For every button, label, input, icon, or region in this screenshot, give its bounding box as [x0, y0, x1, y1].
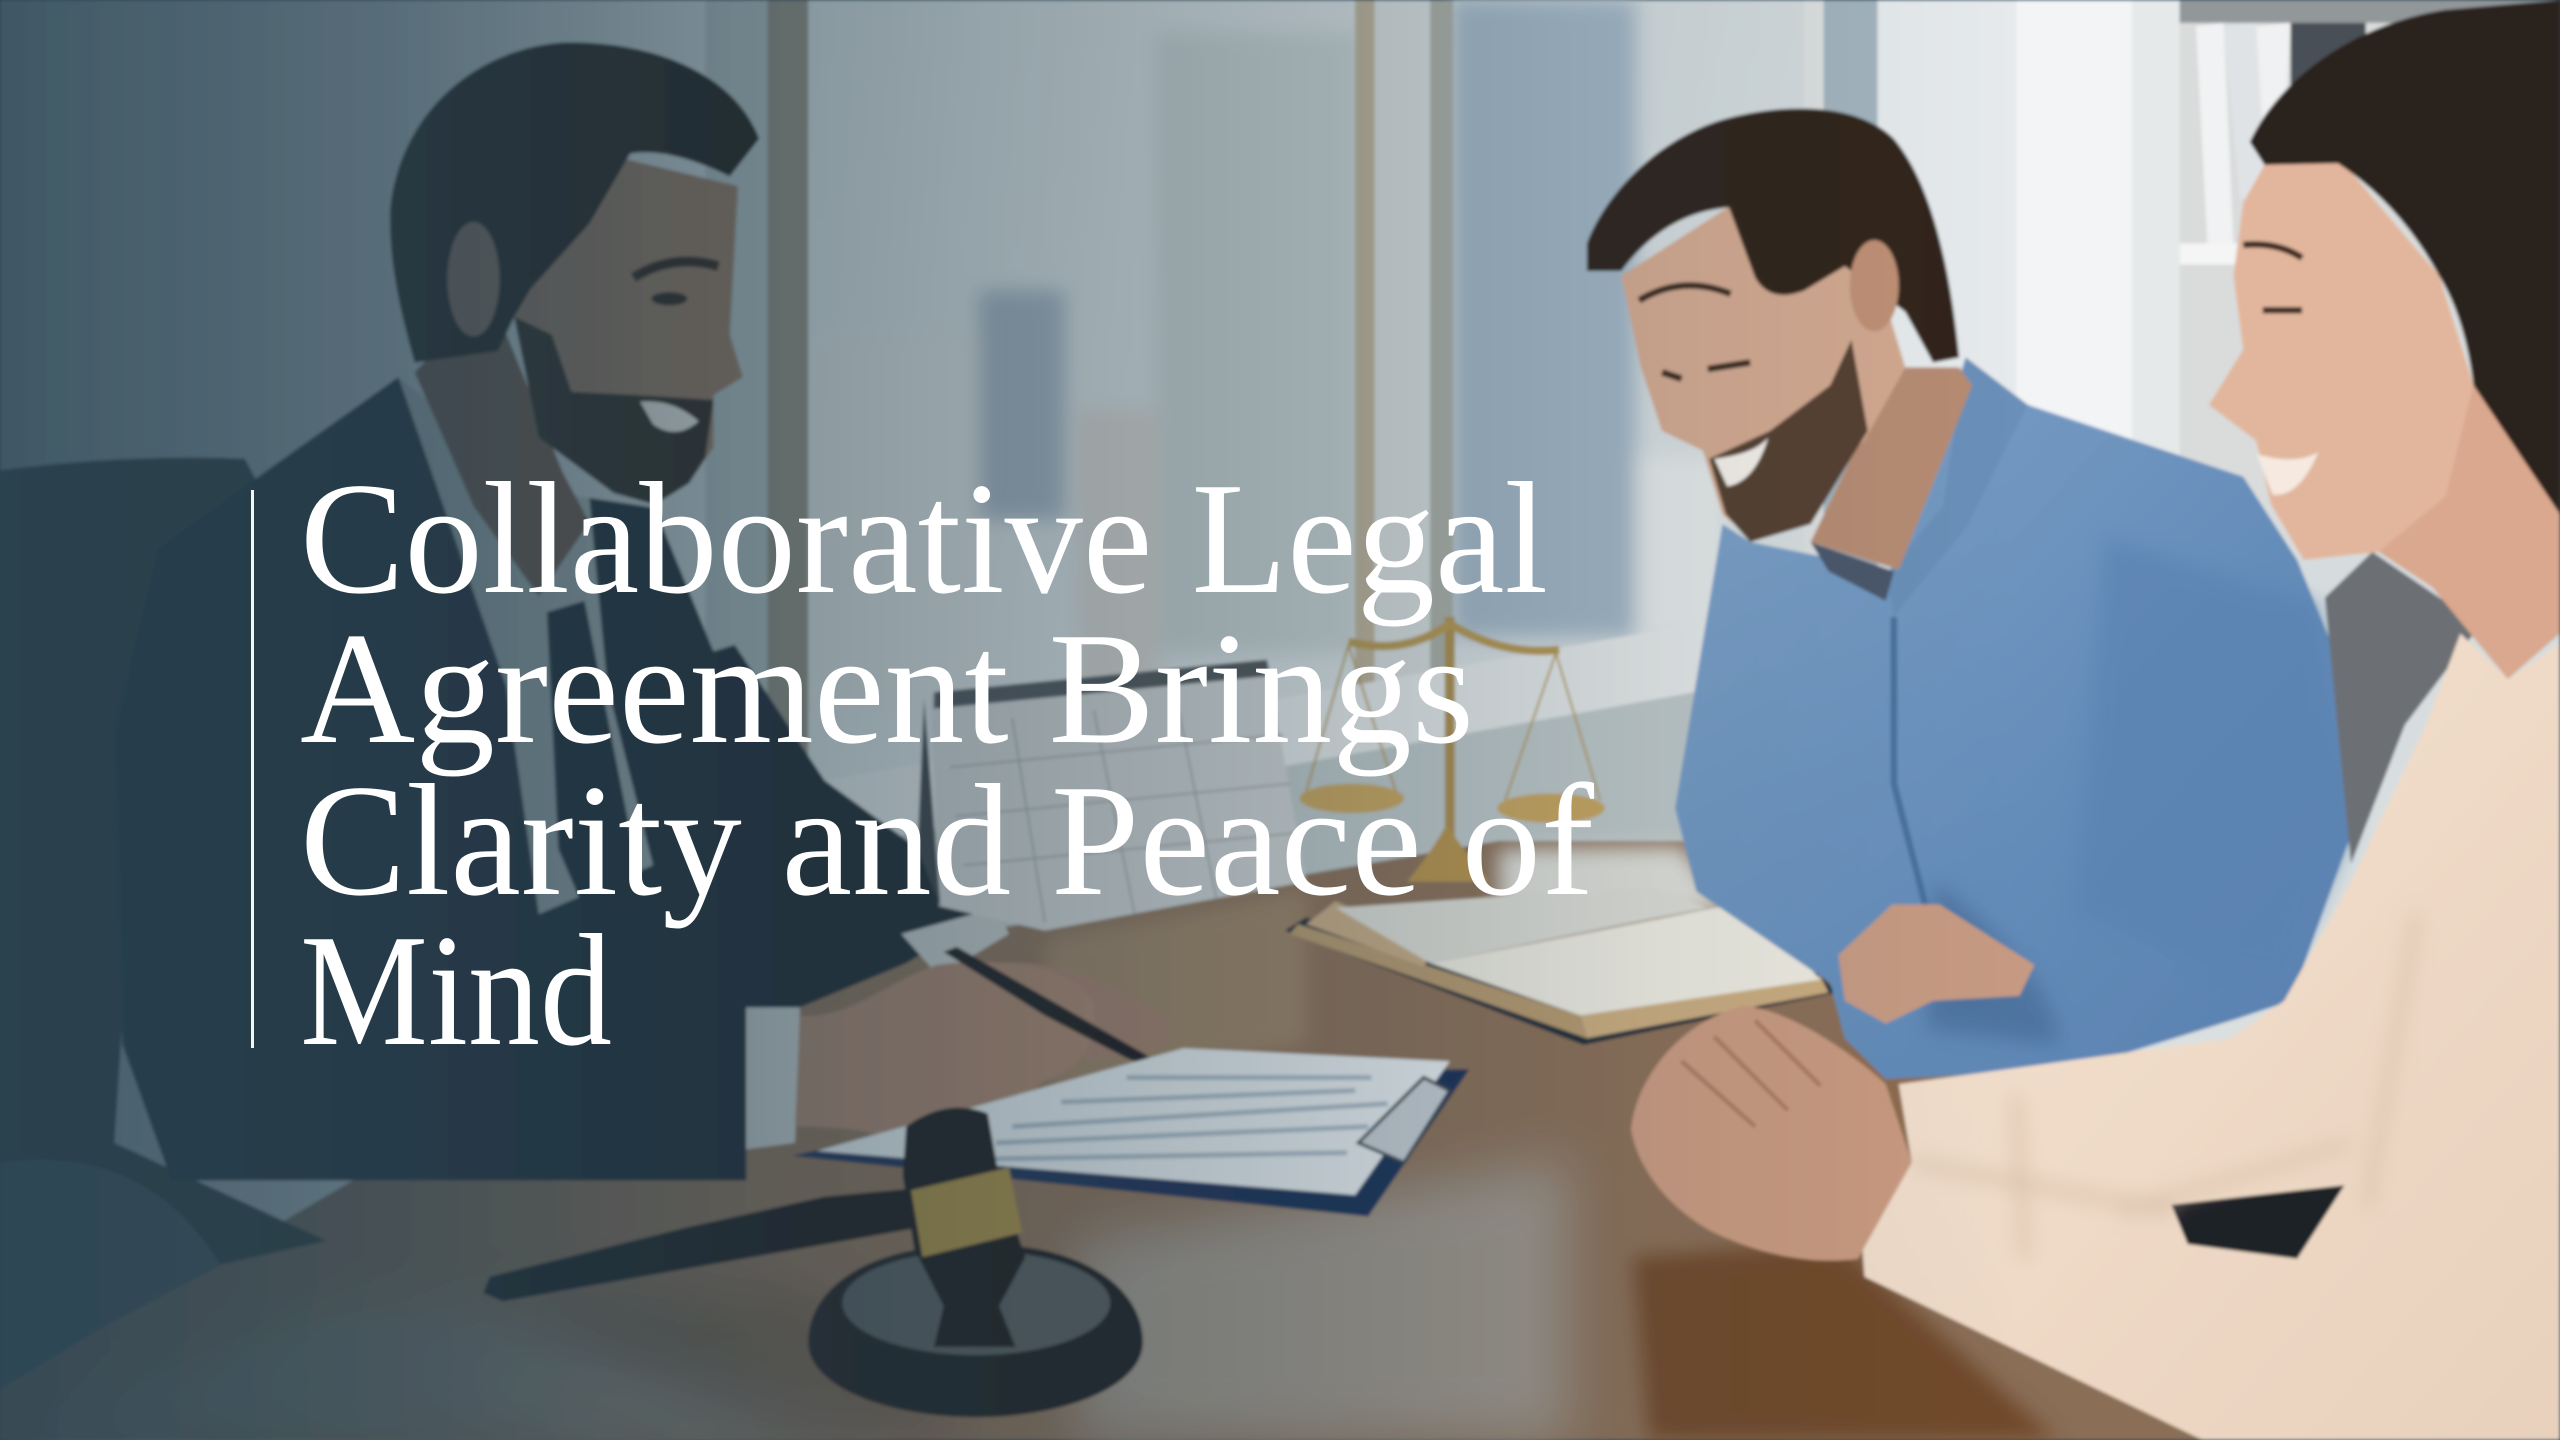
shirt fold shadow	[2073, 539, 2351, 980]
distant buildings	[813, 0, 1726, 710]
blouse folds	[1912, 914, 2416, 1257]
face	[2209, 157, 2473, 560]
blouse	[1861, 633, 2560, 1440]
gavel brass band	[911, 1167, 1022, 1257]
chair behind woman	[2325, 552, 2480, 864]
undershirt	[1811, 542, 1894, 601]
button placket	[1894, 617, 1930, 922]
interior wall	[1878, 0, 2016, 490]
shirt torso	[1675, 358, 2354, 1079]
smile	[1714, 438, 1768, 487]
clipboard with document	[792, 1048, 1469, 1216]
gavel stem and head	[903, 1108, 1025, 1347]
face	[1621, 202, 1905, 537]
eyebrow	[633, 262, 718, 278]
neck	[2379, 385, 2560, 679]
face	[514, 158, 743, 504]
bookshelf	[2132, 0, 2180, 490]
smile	[640, 401, 699, 432]
clasped hands	[1631, 1006, 1912, 1261]
gavel	[483, 1108, 1143, 1417]
right man	[1587, 108, 2354, 1079]
window sill	[808, 617, 1731, 980]
table	[0, 841, 2560, 1440]
pen	[944, 947, 1187, 1082]
scales of justice	[1300, 617, 1605, 882]
title	[300, 449, 1595, 1079]
open book	[1285, 887, 1837, 1045]
arm gap	[2171, 1185, 2344, 1259]
neck	[1811, 367, 1972, 570]
title: Agreement Brings	[300, 599, 1474, 777]
eye	[651, 292, 687, 305]
neck	[415, 294, 589, 596]
hand on table	[1838, 904, 2034, 1024]
suit jacket	[113, 377, 999, 1180]
woman	[1631, 0, 2560, 1440]
hair	[1587, 108, 1959, 362]
calendar	[918, 660, 1306, 931]
sound block	[808, 1244, 1143, 1417]
beard	[514, 317, 713, 504]
ear	[447, 222, 500, 336]
back hand	[980, 963, 1169, 1061]
shirt and tie	[398, 377, 653, 914]
collar	[1886, 358, 2028, 617]
front hand	[795, 962, 1095, 1135]
smile	[2256, 452, 2318, 495]
title: Collaborative Legal	[300, 449, 1548, 627]
beard	[1709, 340, 1868, 542]
accent vertical rule	[251, 490, 254, 1048]
window frames	[705, 0, 767, 751]
hair	[2250, 0, 2560, 514]
gavel handle	[483, 1189, 918, 1301]
table reflections	[1078, 1159, 1567, 1440]
hair	[390, 42, 759, 362]
eyes and brow	[1639, 285, 1750, 379]
title: Clarity and Peace of	[300, 751, 1595, 929]
eye and brow	[2243, 244, 2302, 310]
office chair	[0, 458, 327, 1389]
title: Mind	[300, 901, 612, 1079]
left man: lawyer	[0, 42, 1187, 1389]
ear	[1850, 240, 1899, 331]
sleeve and cuff	[746, 1007, 800, 1149]
